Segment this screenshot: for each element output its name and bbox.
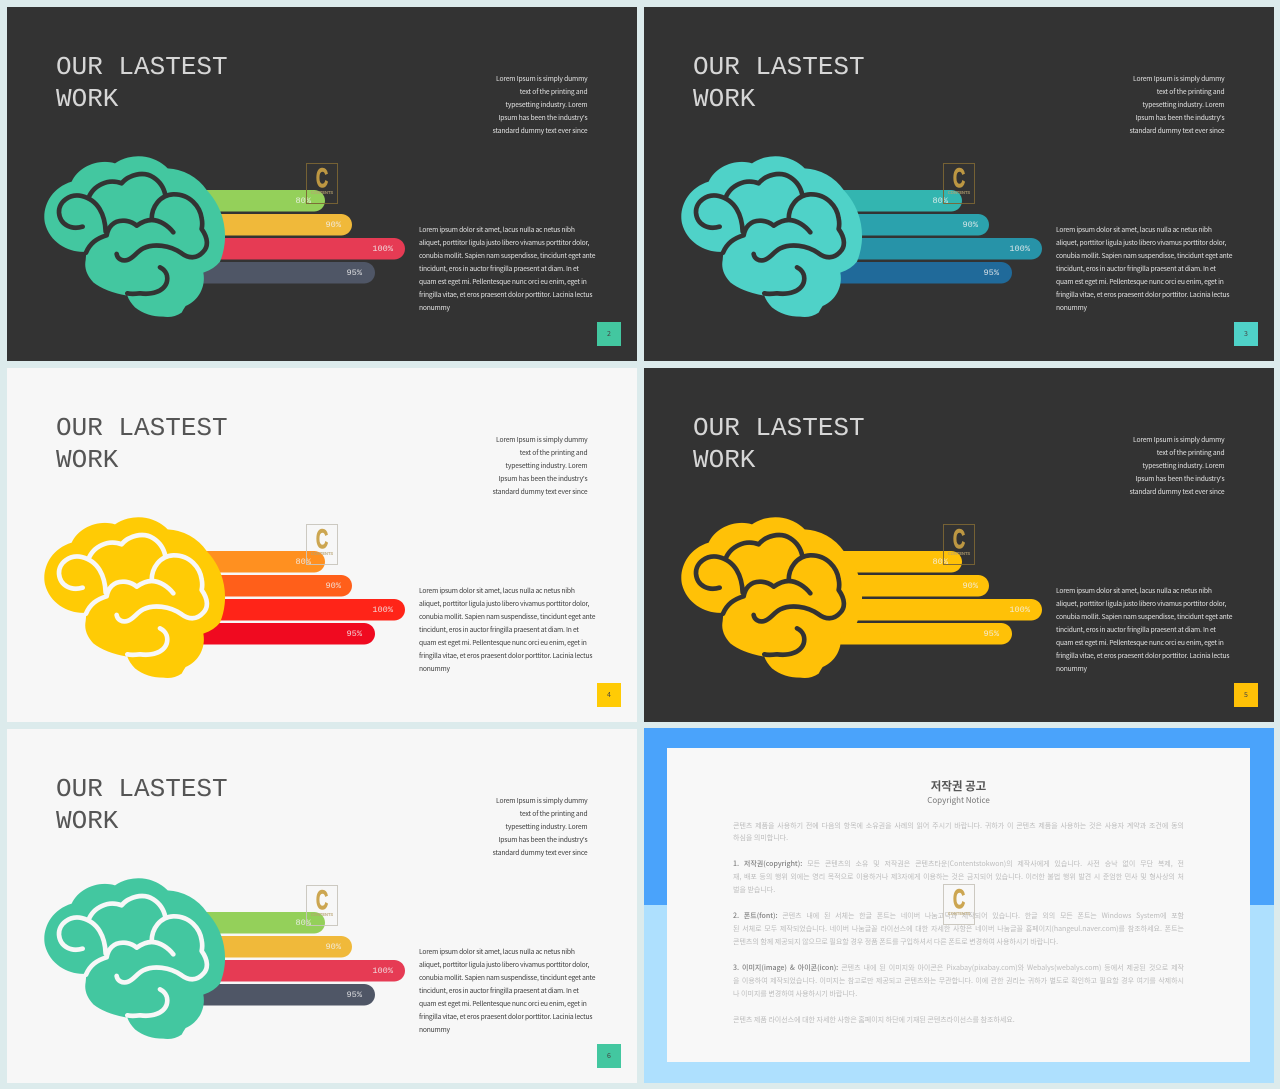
page number bbox=[1234, 322, 1258, 346]
logo watermark: CONTENTS bbox=[311, 190, 333, 195]
logo watermark: CONTENTS bbox=[948, 551, 970, 556]
brain bar chart bbox=[681, 156, 1042, 317]
logo watermark: CONTENTS bbox=[948, 911, 970, 916]
panel: copyright notice bbox=[644, 728, 1274, 1083]
brain bar chart: 100% bbox=[372, 605, 394, 615]
body text: nonummy bbox=[419, 1024, 450, 1034]
body text: conubia mollit. Sapien nam suspendisse, tincidunt eget ante bbox=[419, 611, 595, 621]
brain bar chart: 100% bbox=[1009, 605, 1031, 615]
logo watermark: CONTENTS bbox=[311, 912, 333, 917]
intro text: Ipsum has been the industry's bbox=[498, 834, 588, 844]
body text: tincidunt, eros in auctor fringilla praesent at diam. In et bbox=[419, 985, 579, 995]
intro text: Lorem Ipsum is simply dummy bbox=[1133, 434, 1224, 444]
title: OUR LASTEST WORK bbox=[56, 774, 228, 836]
intro text bbox=[492, 73, 588, 135]
intro text: typesetting industry. Lorem bbox=[506, 99, 588, 109]
logo watermark bbox=[943, 884, 975, 925]
intro text: Ipsum has been the industry's bbox=[1135, 112, 1224, 122]
body text: conubia mollit. Sapien nam suspendisse, tincidunt eget ante bbox=[419, 972, 595, 982]
intro text: standard dummy text ever since bbox=[1130, 486, 1224, 496]
brain bar chart bbox=[681, 517, 1042, 678]
logo watermark: C bbox=[316, 524, 328, 554]
intro text: Lorem Ipsum is simply dummy bbox=[496, 795, 588, 805]
body text: fringilla vitae, et eros praesent dolor porttitor. Lacinia lectus bbox=[419, 1011, 592, 1021]
intro text: standard dummy text ever since bbox=[493, 486, 588, 496]
logo watermark bbox=[943, 163, 975, 204]
brain bar chart: 90% bbox=[326, 581, 342, 591]
body text: quam est eget mi. Pellentesque nunc orci eu enim, eget in bbox=[419, 637, 587, 647]
body text: quam est eget mi. Pellentesque nunc orci eu enim, eget in bbox=[1056, 637, 1224, 647]
body text: fringilla vitae, et eros praesent dolor porttitor. Lacinia lectus bbox=[419, 289, 592, 299]
image clause end: 나 이미지를 변경하여 사용하시기 바랍니다. bbox=[733, 989, 857, 999]
brain bar chart: 90% bbox=[326, 220, 342, 230]
body text: Lorem ipsum dolor sit amet, lacus nulla ac netus nibh bbox=[1056, 224, 1212, 234]
body text bbox=[1056, 585, 1232, 673]
intro text: Lorem Ipsum is simply dummy bbox=[496, 73, 588, 83]
logo watermark: CONTENTS bbox=[311, 551, 333, 556]
font clause end: 콘텐츠의 함께 제공되지 않으므로 필요할 경우 정품 폰트를 구입하셔서 다른 폰트로 변경하여 사용하시기 바랍니다. bbox=[733, 937, 1058, 947]
image clause line 2: 을 이용하여 제작되었습니다. 이미지는 참고로만 제공되고 콘텐츠와는 무관합니다. 이에 관한 권리는 귀하가 별도로 확인하고 필요할 경우 여기를 삭제하시 bbox=[733, 976, 1184, 986]
panel: slide 4 light yellow bbox=[7, 368, 637, 722]
body text: Lorem ipsum dolor sit amet, lacus nulla ac netus nibh bbox=[1056, 585, 1212, 595]
panel: slide 3 dark teal bbox=[644, 7, 1274, 361]
intro text: text of the printing and bbox=[520, 447, 588, 457]
body text: Lorem ipsum dolor sit amet, lacus nulla ac netus nibh bbox=[419, 585, 575, 595]
intro text bbox=[492, 795, 588, 857]
intro text: Ipsum has been the industry's bbox=[498, 473, 588, 483]
brain bar chart: 95% bbox=[347, 990, 363, 1000]
brain bar chart bbox=[44, 156, 405, 317]
brain bar chart: 80% bbox=[933, 557, 949, 567]
page number: 6 bbox=[607, 1051, 611, 1061]
brain bar chart: 100% bbox=[372, 244, 394, 254]
intro text: typesetting industry. Lorem bbox=[506, 821, 588, 831]
page number bbox=[597, 1044, 621, 1068]
body text: tincidunt, eros in auctor fringilla praesent at diam. In et bbox=[419, 624, 579, 634]
intro text: text of the printing and bbox=[520, 808, 588, 818]
intro text: text of the printing and bbox=[520, 86, 588, 96]
logo watermark: C bbox=[316, 885, 328, 915]
intro paragraph end: 하심을 의미합니다. bbox=[733, 833, 788, 843]
title: OUR LASTEST WORK bbox=[693, 52, 865, 114]
logo watermark: C bbox=[953, 524, 965, 554]
brain bar chart: 95% bbox=[347, 268, 363, 278]
body text: quam est eget mi. Pellentesque nunc orci eu enim, eget in bbox=[419, 276, 587, 286]
logo watermark: C bbox=[953, 163, 965, 193]
body text: nonummy bbox=[1056, 663, 1087, 673]
font clause line 2: 된 서체로 모두 제작되었습니다. 네이버 나눔글꼴 라이선스에 대한 자세한 사항은 네이버 나눔글꼴 홈페이지(hangeul.naver.com)를 참조하세요. 폰트는 bbox=[733, 924, 1184, 934]
body text bbox=[419, 585, 596, 673]
intro text bbox=[1130, 73, 1224, 135]
body text: Lorem ipsum dolor sit amet, lacus nulla ac netus nibh bbox=[419, 224, 575, 234]
intro text: Lorem Ipsum is simply dummy bbox=[496, 434, 588, 444]
brain bar chart: 100% bbox=[1009, 244, 1031, 254]
body text bbox=[419, 946, 596, 1034]
logo watermark bbox=[306, 885, 338, 926]
body text: aliquet, porttitor ligula justo libero vivamus porttitor dolor, bbox=[1056, 237, 1226, 247]
intro text bbox=[1130, 434, 1224, 496]
intro text: standard dummy text ever since bbox=[493, 125, 588, 135]
intro text: typesetting industry. Lorem bbox=[1143, 99, 1224, 109]
page number: 2 bbox=[607, 329, 611, 339]
page number bbox=[597, 322, 621, 346]
intro text bbox=[492, 434, 588, 496]
image clause: 3. 이미지(image) & 아이콘(icon): 콘텐츠 내에 된 이미지와 아이콘은 Pixabay(pixabay.com)와 Webalys(webalys.com) 등에서 제공된 것으로 제작 bbox=[733, 963, 1184, 973]
body text: nonummy bbox=[419, 302, 450, 312]
title: OUR LASTEST WORK bbox=[56, 413, 228, 475]
body text: conubia mollit. Sapien nam suspendisse, tincidunt eget ante bbox=[419, 250, 595, 260]
panel: slide 5 dark yellow bbox=[644, 368, 1274, 722]
brain bar chart: 80% bbox=[933, 196, 949, 206]
body text: fringilla vitae, et eros praesent dolor porttitor. Lacinia lectus bbox=[1056, 289, 1229, 299]
body text: tincidunt, eros in auctor fringilla praesent at diam. In et bbox=[1056, 624, 1216, 634]
intro text: text of the printing and bbox=[1157, 447, 1224, 457]
body text: tincidunt, eros in auctor fringilla praesent at diam. In et bbox=[1056, 263, 1216, 273]
brain bar chart: 90% bbox=[963, 220, 979, 230]
copyright clause line 2: 재, 배포 등의 행위 외에는 영리 목적으로 이용하거나 제3자에게 이용하는 것은 금지되어 있습니다. 이러한 불법 행위 발견 시 준엄한 민사 및 형사상의 처 bbox=[733, 872, 1184, 882]
body text: fringilla vitae, et eros praesent dolor porttitor. Lacinia lectus bbox=[1056, 650, 1229, 660]
brain bar chart: 90% bbox=[963, 581, 979, 591]
intro text: typesetting industry. Lorem bbox=[506, 460, 588, 470]
closing line: 콘텐츠 제품 라이선스에 대한 자세한 사항은 홈페이지 하단에 기재된 콘텐츠라이선스를 참조하세요. bbox=[733, 1015, 1015, 1025]
body text: conubia mollit. Sapien nam suspendisse, tincidunt eget ante bbox=[1056, 611, 1232, 621]
page number bbox=[1234, 683, 1258, 707]
body text bbox=[419, 224, 596, 312]
logo watermark bbox=[943, 524, 975, 565]
title: OUR LASTEST WORK bbox=[693, 413, 865, 475]
logo watermark bbox=[306, 524, 338, 565]
brain bar chart bbox=[44, 517, 405, 678]
page number: 3 bbox=[1244, 329, 1248, 339]
intro text: standard dummy text ever since bbox=[1130, 125, 1224, 135]
intro text: typesetting industry. Lorem bbox=[1143, 460, 1224, 470]
logo watermark bbox=[306, 163, 338, 204]
intro text: text of the printing and bbox=[1157, 86, 1224, 96]
body text: aliquet, porttitor ligula justo libero vivamus porttitor dolor, bbox=[419, 959, 589, 969]
logo watermark: CONTENTS bbox=[948, 190, 970, 195]
page number: 4 bbox=[607, 690, 611, 700]
brain bar chart: 80% bbox=[296, 557, 312, 567]
brain bar chart: 95% bbox=[984, 629, 1000, 639]
brain bar chart bbox=[44, 878, 405, 1039]
body text: conubia mollit. Sapien nam suspendisse, tincidunt eget ante bbox=[1056, 250, 1232, 260]
body text: tincidunt, eros in auctor fringilla praesent at diam. In et bbox=[419, 263, 579, 273]
body text: Lorem ipsum dolor sit amet, lacus nulla ac netus nibh bbox=[419, 946, 575, 956]
page number bbox=[597, 683, 621, 707]
intro text: Ipsum has been the industry's bbox=[1135, 473, 1224, 483]
body text: aliquet, porttitor ligula justo libero vivamus porttitor dolor, bbox=[1056, 598, 1226, 608]
body text: aliquet, porttitor ligula justo libero vivamus porttitor dolor, bbox=[419, 237, 589, 247]
copyright clause end: 벌을 받습니다. bbox=[733, 885, 775, 895]
intro paragraph: 콘텐츠 제품을 사용하기 전에 다음의 항목에 소유권을 사례의 읽어 주시기 바랍니다. 귀하가 이 콘텐츠 제품을 사용하는 것은 사용자 계약과 조건에 동의 bbox=[733, 821, 1184, 831]
notice subheading: Copyright Notice bbox=[927, 795, 990, 806]
font clause: 2. 폰트(font): 콘텐츠 내에 된 서체는 한글 폰트는 네이버 나눔고딕과 제작되어 있습니다. 한글 외의 모든 폰트는 Windows System에 포함 bbox=[733, 911, 1184, 921]
brain bar chart: 80% bbox=[296, 918, 312, 928]
body text: fringilla vitae, et eros praesent dolor porttitor. Lacinia lectus bbox=[419, 650, 592, 660]
brain bar chart: 80% bbox=[296, 196, 312, 206]
page number: 5 bbox=[1244, 690, 1248, 700]
panel: slide 6 light green bbox=[7, 729, 637, 1083]
body text: aliquet, porttitor ligula justo libero vivamus porttitor dolor, bbox=[419, 598, 589, 608]
intro text: Ipsum has been the industry's bbox=[498, 112, 588, 122]
body text bbox=[1056, 224, 1232, 312]
body text: nonummy bbox=[1056, 302, 1087, 312]
body text: quam est eget mi. Pellentesque nunc orci eu enim, eget in bbox=[419, 998, 587, 1008]
brain bar chart: 100% bbox=[372, 966, 394, 976]
brain bar chart: 95% bbox=[347, 629, 363, 639]
intro text: standard dummy text ever since bbox=[493, 847, 588, 857]
intro text: Lorem Ipsum is simply dummy bbox=[1133, 73, 1224, 83]
notice card bbox=[667, 748, 1250, 1062]
logo watermark: C bbox=[953, 884, 965, 914]
panel: slide 2 dark green bbox=[7, 7, 637, 361]
copyright clause: 1. 저작권(copyright): 모든 콘텐츠의 소유 및 저작권은 콘텐츠타운(Contentstokwon)의 제작사에게 있습니다. 사전 승낙 없이 무단 복제, 전 bbox=[733, 859, 1184, 869]
body text: quam est eget mi. Pellentesque nunc orci eu enim, eget in bbox=[1056, 276, 1224, 286]
notice heading: 저작권 공고 bbox=[931, 778, 986, 794]
brain bar chart: 95% bbox=[984, 268, 1000, 278]
title: OUR LASTEST WORK bbox=[56, 52, 228, 114]
body text: nonummy bbox=[419, 663, 450, 673]
logo watermark: C bbox=[316, 163, 328, 193]
brain bar chart: 90% bbox=[326, 942, 342, 952]
